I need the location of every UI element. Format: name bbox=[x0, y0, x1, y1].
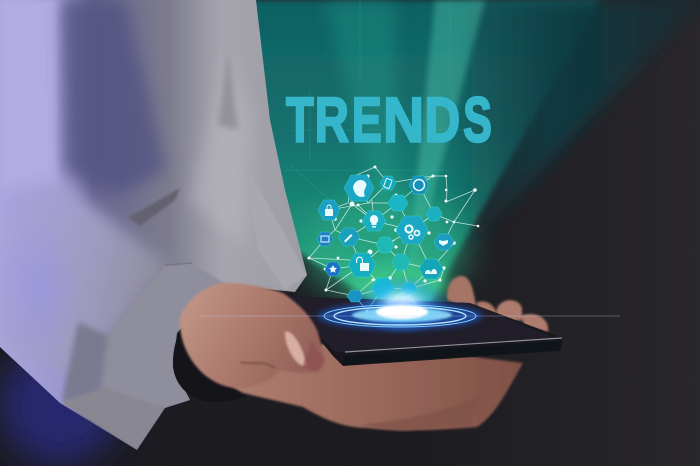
icon: handshake bbox=[439, 240, 448, 246]
hexagon: gears bbox=[396, 216, 428, 244]
heading: TRENDS: S bbox=[463, 85, 492, 156]
hexagon: plain bbox=[376, 237, 394, 253]
hexagon: handshake bbox=[434, 234, 454, 250]
network nodes bbox=[308, 166, 479, 312]
hexagon: open padlock bbox=[348, 253, 376, 277]
icon: star bbox=[329, 265, 337, 273]
hand palm and fingers bbox=[173, 276, 548, 431]
hexagon: envelope bbox=[317, 232, 333, 246]
heading: TRENDS: E bbox=[352, 85, 382, 155]
projector glow and rings bbox=[200, 275, 620, 335]
hexagon: plain bbox=[392, 254, 410, 270]
icon: padlock bbox=[325, 204, 333, 216]
hexagon: tablet bbox=[380, 176, 396, 190]
icon: envelope bbox=[321, 236, 329, 242]
hologram light beam bbox=[240, 0, 700, 305]
heading: TRENDS: T bbox=[286, 84, 314, 155]
hexagon: globe bbox=[344, 175, 374, 201]
hexagon icon cells bbox=[317, 175, 454, 302]
hexagon: padlock bbox=[318, 200, 340, 220]
hexagon: plain bbox=[388, 195, 408, 211]
icon: gears bbox=[406, 226, 412, 232]
icon: people bbox=[425, 269, 437, 274]
hexagon: star bbox=[325, 262, 341, 276]
hexagon icons bbox=[321, 178, 448, 274]
hexagon: plain bbox=[426, 207, 442, 221]
hexagon: plain bbox=[347, 290, 363, 302]
hexagon: pie chart bbox=[409, 176, 429, 194]
hexagon: light bulb bbox=[362, 211, 386, 231]
icon: open padlock bbox=[356, 257, 369, 271]
shirt torso and arm bbox=[0, 0, 307, 450]
hexagon: plain bbox=[372, 278, 394, 298]
hexagon: people bbox=[419, 259, 443, 279]
icon: globe bbox=[353, 180, 366, 197]
hexagon: key bbox=[338, 228, 360, 246]
smartphone bbox=[282, 296, 563, 366]
heading: TRENDS: D bbox=[425, 85, 460, 155]
icon: key bbox=[344, 234, 352, 242]
network of hologram lines and nodes bbox=[309, 167, 478, 311]
icon: tablet bbox=[383, 178, 392, 189]
hexagon: plain bbox=[401, 283, 417, 295]
heading: TRENDS: N bbox=[383, 85, 424, 155]
thumb bbox=[180, 283, 325, 388]
icon: light bulb bbox=[370, 215, 378, 228]
heading: TRENDS bbox=[286, 84, 492, 156]
heading: TRENDS: R bbox=[315, 85, 349, 155]
icon: pie chart bbox=[414, 180, 424, 190]
